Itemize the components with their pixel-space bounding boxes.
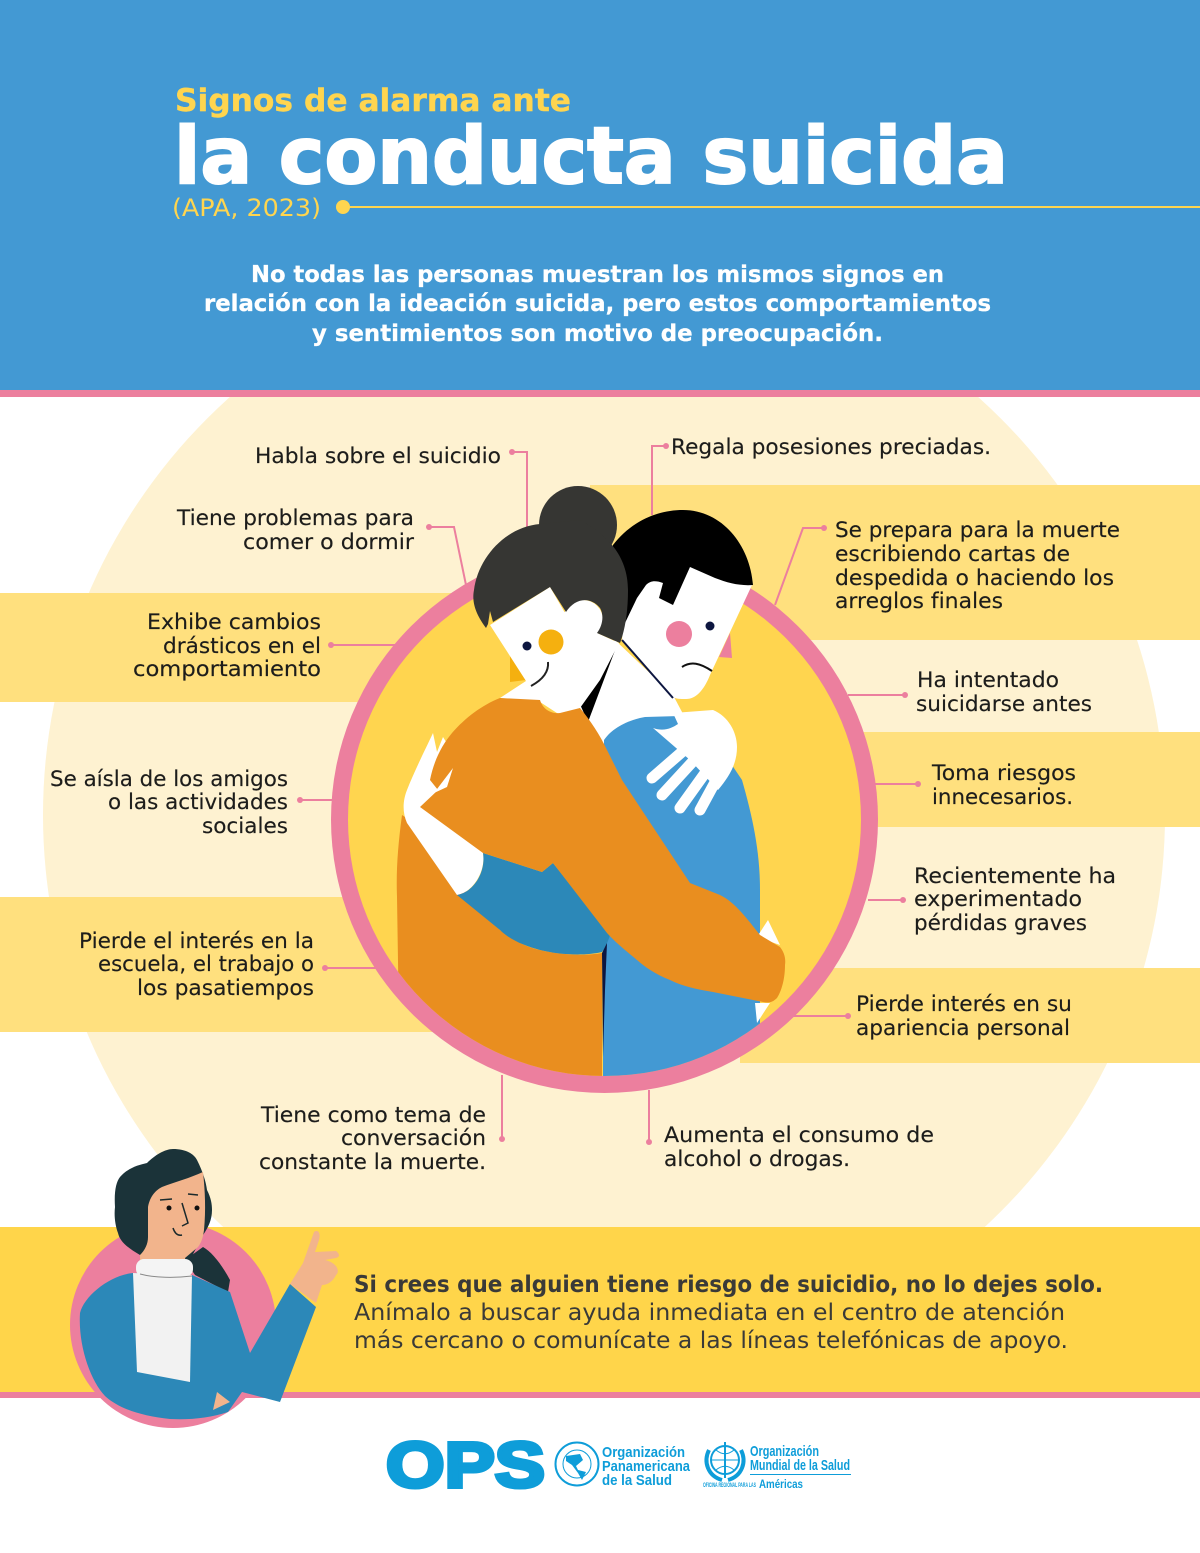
label: pérdidas: Recientemente ha	[914, 864, 1116, 889]
label: aislamiento: Se aísla de los amigos	[50, 767, 288, 792]
citation with rule	[172, 194, 1200, 222]
citation with rule: (APA, 2023)	[172, 194, 321, 222]
label: pérdidas: pérdidas graves	[914, 911, 1087, 936]
garment seam	[602, 943, 607, 1057]
woman's hand on shoulder	[652, 710, 737, 810]
label: interés: Pierde el interés en la	[79, 929, 314, 954]
woman's head	[473, 486, 628, 715]
label group left	[50, 444, 501, 1175]
label: cartas: Se prepara para la muerte	[835, 518, 1120, 543]
label: consumo: alcohol o drogas.	[664, 1147, 850, 1172]
label: consumo: Aumenta el consumo de	[664, 1123, 934, 1148]
label: interés	[79, 929, 314, 1001]
label: aislamiento: o las actividades	[108, 790, 288, 815]
label: intento	[916, 668, 1092, 717]
woman's fingertip	[434, 768, 453, 793]
central ring	[331, 546, 878, 1093]
intro paragraph	[204, 262, 991, 347]
woman's far hand and arm	[404, 733, 483, 895]
logo: PAHO emblem	[556, 1442, 598, 1486]
label: cambios: Exhibe cambios	[147, 610, 321, 635]
title kicker: Signos de alarma ante	[175, 83, 571, 119]
bottom callout band	[0, 1227, 1200, 1398]
label: problemas	[176, 506, 414, 555]
label: pérdidas	[914, 864, 1116, 936]
callout text: Si crees que alguien tiene riesgo de suicidio, no lo dejes solo.	[354, 1272, 1103, 1298]
logo: WHO name: OFICINA REGIONAL PARA LAS	[703, 1483, 756, 1489]
label: problemas: Tiene problemas para	[176, 506, 414, 531]
woman's sweater and arm	[420, 698, 785, 1003]
pale background circle	[43, 397, 1165, 1227]
logo: PAHO name: Organización	[602, 1444, 685, 1461]
label: cartas: arreglos finales	[835, 589, 1003, 614]
callout text	[354, 1272, 1103, 1354]
label: muerte: conversación	[341, 1126, 486, 1151]
logo: WHO name: Américas	[759, 1477, 803, 1491]
logo: OPS	[386, 1429, 851, 1501]
label: apariencia: apariencia personal	[856, 1016, 1070, 1041]
logo: WHO emblem	[707, 1442, 743, 1480]
illustration: embracing couple	[397, 486, 785, 1090]
label: apariencia: Pierde interés en su	[856, 992, 1072, 1017]
label: apariencia	[856, 992, 1072, 1041]
woman's skirt	[397, 815, 602, 1090]
logo: PAHO name	[602, 1444, 691, 1489]
main title: la conducta suicida	[174, 112, 1008, 202]
callout text: Anímalo a buscar ayuda inmediata en el centro de atención	[354, 1300, 1065, 1326]
label: interés: los pasatiempos	[137, 976, 314, 1001]
label: cambios: comportamiento	[133, 657, 321, 682]
label: consumo	[664, 1123, 934, 1172]
logo: WHO name: Mundial de la Salud	[750, 1457, 850, 1474]
label: intento: suicidarse antes	[916, 692, 1092, 717]
label: cartas: despedida o haciendo los	[835, 566, 1114, 591]
label: posesiones: Regala posesiones preciadas.	[671, 435, 991, 460]
logo: OPS: OPS	[386, 1429, 545, 1501]
label: muerte	[259, 1103, 486, 1175]
intro paragraph: relación con la ideación suicida, pero estos comportamientos	[204, 291, 991, 317]
label: cambios	[133, 610, 321, 682]
illustration: advisor woman	[70, 1149, 339, 1428]
label: riesgos: innecesarios.	[932, 785, 1073, 810]
label: riesgos	[931, 761, 1076, 810]
logo: PAHO name: de la Salud	[602, 1472, 672, 1489]
woman's inner sleeve	[457, 853, 610, 954]
header panel	[0, 0, 1200, 397]
label: habla: Habla sobre el suicidio	[255, 444, 501, 469]
intro paragraph: y sentimientos son motivo de preocupación.	[312, 321, 883, 347]
label: cartas	[835, 518, 1120, 614]
label: muerte: Tiene como tema de	[260, 1103, 486, 1128]
logo: WHO name	[703, 1443, 851, 1491]
label: interés: escuela, el trabajo o	[98, 952, 314, 977]
yellow background bands	[0, 485, 1200, 1063]
leader lines	[297, 443, 921, 1145]
label: cambios: drásticos en el	[163, 634, 321, 659]
label: problemas: comer o dormir	[243, 530, 414, 555]
logo: PAHO name: Panamericana	[602, 1458, 691, 1475]
label: riesgos: Toma riesgos	[931, 761, 1076, 786]
label: muerte: constante la muerte.	[259, 1150, 486, 1175]
logo: WHO name: Organización	[750, 1443, 819, 1460]
label: intento: Ha intentado	[917, 668, 1059, 693]
label: pérdidas: experimentado	[914, 887, 1082, 912]
callout text: más cercano o comunícate a las líneas telefónicas de apoyo.	[354, 1328, 1068, 1354]
label: aislamiento	[50, 767, 288, 839]
label: cartas: escribiendo cartas de	[835, 542, 1070, 567]
label: aislamiento: sociales	[202, 814, 288, 839]
man's head	[578, 510, 753, 722]
man's neck	[578, 640, 690, 745]
intro paragraph: No todas las personas muestran los mismos signos en	[251, 262, 944, 288]
man's body	[603, 716, 780, 1090]
label group right	[664, 435, 1120, 1172]
